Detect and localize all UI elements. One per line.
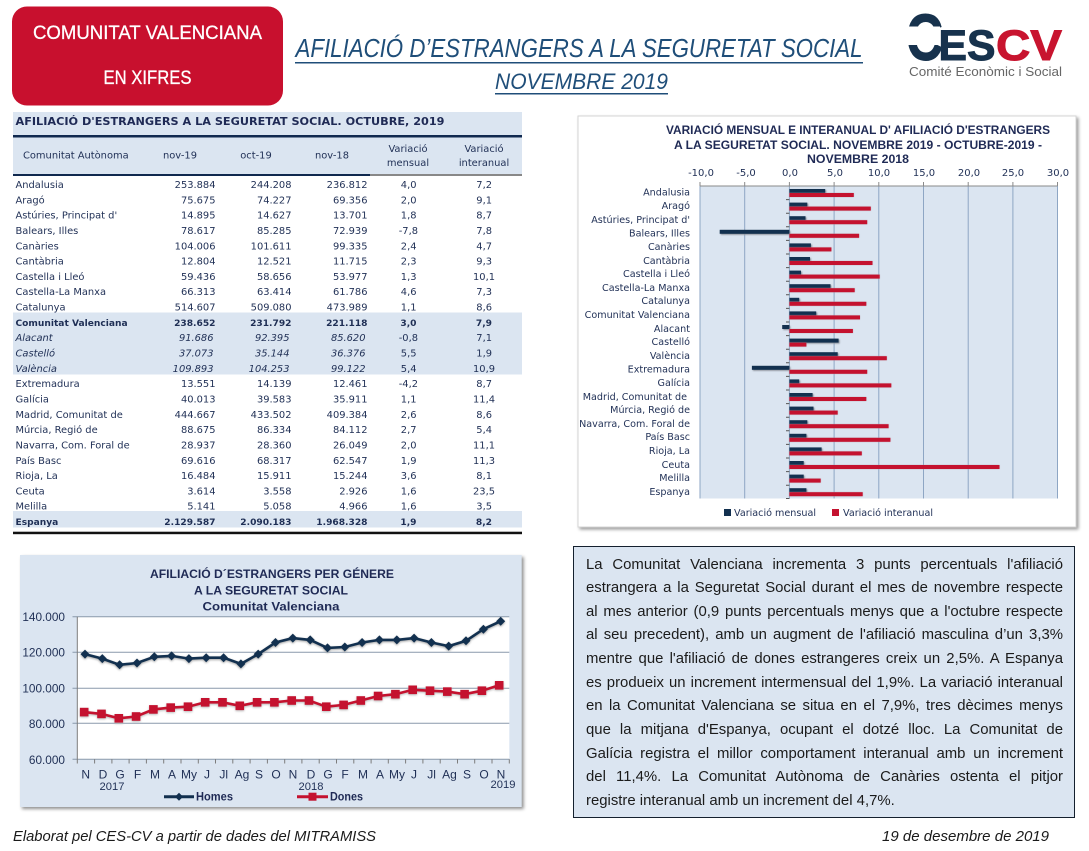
- table rows: 2,6: [401, 410, 416, 421]
- table rows: 85.620: [331, 333, 366, 344]
- table rows: 1,6: [401, 502, 416, 513]
- table rows: 88.675: [181, 425, 216, 436]
- table rows: Melilla: [16, 502, 47, 513]
- bar chart category labels: Cantàbria: [643, 255, 690, 267]
- panel: monthly and year-on-year variation bar chart: [578, 116, 1076, 527]
- bar chart category labels: Andalusia: [643, 188, 690, 198]
- line chart title: [150, 568, 394, 614]
- table rows: 8,2: [476, 518, 492, 528]
- bar chart title: [666, 124, 1050, 166]
- x axis labels: J: [204, 768, 210, 782]
- table rows: 433.502: [251, 410, 292, 421]
- table rows: Canàries: [16, 240, 59, 252]
- x axis labels: F: [341, 768, 349, 782]
- table rows: 28.360: [257, 440, 292, 451]
- bar chart category labels: Galícia: [658, 377, 690, 389]
- badge: Comunitat Valenciana en xifres: EN XIFRES: [104, 67, 192, 89]
- bar chart top axis labels: 10,0: [868, 168, 890, 179]
- text block: summary commentary: al mes anterior (0,9 punts percentuals menys que a l'octubre respecte: [586, 604, 1063, 620]
- bar chart category labels: Aragó: [662, 200, 690, 212]
- y axis labels: 100.000: [22, 682, 65, 696]
- x axis labels: F: [134, 768, 141, 782]
- table rows: Balears, Illes: [16, 226, 78, 237]
- title: [294, 33, 863, 94]
- table rows: 8,6: [476, 410, 492, 421]
- table rows: 238.652: [174, 319, 216, 329]
- bar chart category labels: Castelló: [652, 336, 690, 348]
- logo: CES-CV: ES: [938, 22, 996, 70]
- table rows: 61.786: [333, 287, 368, 298]
- title: AFILIACIÓ D’ESTRANGERS A LA SEGURETAT SOCIAL: [294, 33, 863, 63]
- table rows: Extremadura: [16, 379, 80, 390]
- y axis labels: 80.000: [29, 717, 65, 731]
- table rows: 78.617: [181, 226, 216, 237]
- panel: gender line chart: [20, 555, 522, 807]
- table rows: 2,4: [401, 241, 416, 252]
- table title band: AFILIACIÓ D'ESTRANGERS A LA SEGURETAT SOCIAL. OCTUBRE, 2019: [16, 115, 444, 128]
- text block: summary commentary: Galícia registra el millor comportament interanual amb un increment: [586, 746, 1063, 762]
- bar chart category labels: Balears, Illes: [629, 228, 690, 240]
- table rows: 7,8: [476, 226, 492, 237]
- table rows: 99.122: [331, 364, 366, 375]
- line: Homes: [85, 621, 501, 665]
- table rows: Andalusia: [16, 180, 64, 191]
- table rows: 244.208: [251, 180, 292, 191]
- table column headers: nov-19: [163, 150, 197, 162]
- table rows: 68.317: [257, 456, 292, 467]
- table rows: 10,9: [473, 364, 495, 375]
- bar chart category labels: Canàries: [648, 241, 690, 253]
- x axis labels: S: [463, 768, 471, 782]
- table rows: Espanya: [16, 518, 58, 528]
- table rows: 13.701: [333, 211, 368, 222]
- table rows: 104.006: [175, 241, 216, 252]
- table rows: 9,3: [476, 257, 492, 268]
- table rows: 1,1: [401, 303, 416, 314]
- table rows: 2,7: [401, 425, 416, 436]
- bar chart top axis labels: 30,0: [1047, 168, 1069, 179]
- table title band: [13, 112, 522, 138]
- x axis labels: Jl: [427, 768, 436, 782]
- line chart title: Comunitat Valenciana: [202, 600, 340, 614]
- table rows: 8,7: [476, 379, 492, 390]
- table rows: Navarra, Com. Foral de: [16, 440, 130, 451]
- text block: summary commentary: estrangera a la Seguretat Social durant el mes de novembre respecte: [586, 580, 1063, 596]
- bar chart category labels: Astúries, Principat d': [591, 214, 690, 226]
- table rows: 3,0: [400, 319, 416, 329]
- table column headers: Variació: [388, 143, 428, 155]
- table rows: 5.058: [263, 502, 292, 513]
- table rows: 8,7: [476, 211, 492, 222]
- table rows: Galícia: [16, 394, 49, 406]
- table rows: 15.244: [333, 471, 368, 482]
- table rows: 92.395: [255, 333, 290, 344]
- x axis labels: N: [289, 768, 297, 782]
- table rows: País Basc: [16, 455, 62, 467]
- table rows: 35.911: [333, 394, 368, 406]
- table rows: 58.656: [257, 272, 292, 283]
- table rows: 2,3: [401, 257, 416, 268]
- bar chart title: VARIACIÓ MENSUAL E INTERANUAL D' AFILIACIÓ D'ESTRANGERS: [666, 124, 1050, 137]
- table rows: 4,0: [401, 180, 416, 191]
- table rows: 62.547: [333, 456, 368, 467]
- table rows: 75.675: [181, 195, 216, 206]
- table rows: 59.436: [181, 272, 216, 283]
- bar chart category labels: Múrcia, Regió de: [610, 404, 690, 416]
- table rows: Castelló: [16, 348, 55, 360]
- table rows: 11,3: [473, 456, 495, 467]
- x axis labels: N: [497, 768, 505, 782]
- x axis labels: J: [411, 768, 417, 782]
- badge: Comunitat Valenciana en xifres: COMUNITAT VALENCIANA: [33, 22, 262, 44]
- table column headers: interanual: [459, 158, 509, 169]
- table rows: 12.461: [333, 379, 368, 390]
- line chart plot area: [72, 617, 509, 764]
- x axis labels: Ag: [235, 768, 249, 782]
- table rows: 3.614: [187, 486, 216, 497]
- table rows: 1.968.328: [316, 518, 368, 528]
- table rows: 36.376: [331, 348, 366, 360]
- table rows: Madrid, Comunitat de: [16, 410, 123, 421]
- table rows: 11.715: [333, 257, 368, 268]
- x axis labels: G: [115, 768, 125, 782]
- table rows: 11,1: [473, 440, 495, 451]
- text block: summary commentary: mentre que l'afiliació de dones estrangeres creix un 2,5%. A Espanya: [586, 651, 1063, 667]
- table rows: 85.285: [257, 226, 292, 237]
- bar chart category labels: Rioja, La: [649, 446, 690, 457]
- badge: Comunitat Valenciana en xifres: [12, 6, 283, 106]
- logo: CES-CV: CV: [996, 22, 1062, 70]
- text block: summary commentary: en la Comunitat Valenciana se situa en el 7,9%, tres dècimes menys: [586, 698, 1063, 714]
- table rows: -0,8: [399, 333, 418, 344]
- bar chart top axis labels: 15,0: [913, 168, 935, 179]
- bar chart category labels: [579, 188, 690, 498]
- table rows: Ceuta: [16, 486, 45, 497]
- x axis labels: My: [389, 768, 405, 782]
- bar chart top axis labels: 0,0: [782, 168, 798, 179]
- line chart legend: Homes: [196, 792, 233, 804]
- highlighted bands: [13, 312, 522, 528]
- table rows: 104.253: [249, 364, 290, 375]
- table rows: 444.667: [175, 410, 216, 421]
- table rows: 74.227: [257, 195, 292, 206]
- table rows: 69.356: [333, 195, 368, 206]
- x axis labels: M: [150, 768, 160, 782]
- table rows: 53.977: [333, 272, 368, 283]
- table rows: 86.334: [257, 425, 292, 436]
- table rows: 509.080: [251, 303, 292, 314]
- table rows: 7,2: [476, 180, 492, 191]
- table rows: 473.989: [327, 303, 368, 314]
- bar chart top axis labels: 20,0: [958, 168, 980, 179]
- table rows: 1,6: [401, 486, 416, 497]
- bar chart category labels: Comunitat Valenciana: [585, 310, 690, 321]
- bar chart category labels: Extremadura: [628, 364, 690, 376]
- table rows: 8,6: [476, 303, 492, 314]
- line: Dones: [84, 685, 499, 718]
- table rows: 5.141: [187, 502, 216, 513]
- bars: monthly variation: [720, 189, 839, 492]
- table rows: 1,9: [400, 518, 416, 528]
- line chart title: AFILIACIÓ D´ESTRANGERS PER GÉNERE: [150, 568, 394, 581]
- table column headers: nov-18: [315, 150, 349, 162]
- table rows: 72.939: [333, 226, 368, 237]
- table rows: Astúries, Principat d': [16, 210, 117, 222]
- table rows: 12.521: [257, 257, 292, 268]
- x axis labels: A: [168, 768, 176, 782]
- table rows: 37.073: [179, 348, 214, 360]
- table rows: Múrcia, Regió de: [16, 424, 98, 436]
- table rows: 63.414: [257, 287, 292, 298]
- line chart title: A LA SEGURETAT SOCIAL: [194, 584, 348, 598]
- table rows: 84.112: [333, 425, 368, 436]
- x axis labels: O: [271, 768, 281, 782]
- table rows: 1,8: [401, 211, 416, 222]
- table rows: [14, 180, 495, 528]
- x axis labels: Jl: [219, 768, 228, 782]
- table rows: 2,0: [401, 195, 416, 206]
- table rows: 8,1: [476, 471, 492, 482]
- table rows: 3,6: [401, 471, 416, 482]
- table rows: 14.895: [181, 211, 216, 222]
- table rows: 11,4: [473, 394, 495, 406]
- table rows: Cantàbria: [16, 256, 64, 268]
- table column headers: Variació: [464, 143, 504, 155]
- table rows: 28.937: [181, 440, 216, 451]
- table rows: 3.558: [263, 486, 292, 497]
- table rows: 1,9: [401, 456, 416, 467]
- table rows: 101.611: [251, 241, 292, 252]
- table rows: -7,8: [399, 226, 418, 237]
- table rows: 221.118: [326, 319, 368, 329]
- table column headers: mensual: [387, 158, 429, 169]
- table rows: 7,9: [476, 319, 492, 329]
- bar chart title: NOVEMBRE 2018: [807, 153, 910, 166]
- x axis labels: S: [255, 768, 263, 782]
- table column headers: Comunitat Autònoma: [23, 150, 129, 162]
- x axis labels: 2018: [299, 781, 323, 793]
- x axis labels: D: [99, 768, 108, 782]
- footer: date: 19 de desembre de 2019: [882, 828, 1050, 845]
- table rows: 253.884: [175, 180, 216, 191]
- table rows: Castella i Lleó: [16, 271, 84, 283]
- table rows: Aragó: [16, 194, 45, 206]
- table rows: 26.049: [333, 440, 368, 451]
- table rows: 39.583: [257, 394, 292, 406]
- table rows: 12.804: [181, 257, 216, 268]
- x axis labels: G: [323, 768, 333, 782]
- x axis labels: O: [479, 768, 489, 782]
- text block: summary commentary: del 11,4%. La Comunitat Autònoma de Canàries ostenta el pitjor: [586, 769, 1063, 785]
- table rows: 2.129.587: [164, 518, 216, 528]
- x axis labels: M: [358, 768, 368, 782]
- table rows: Rioja, La: [16, 471, 58, 482]
- bar chart category labels: País Basc: [645, 431, 690, 443]
- line chart legend: [164, 792, 363, 804]
- logo: CES-CV: Comité Econòmic i Social: [909, 64, 1062, 79]
- text block: summary commentary: La Comunitat Valenciana incrementa 3 punts percentuals l'afiliació: [586, 556, 1063, 572]
- table rows: 35.144: [255, 348, 290, 360]
- bar chart category labels: Ceuta: [662, 460, 690, 471]
- bar chart top axis labels: -10,0: [688, 168, 714, 179]
- table rows: 91.686: [179, 333, 214, 344]
- table rows: -4,2: [399, 379, 418, 390]
- table rows: 1,3: [401, 272, 416, 283]
- title: NOVEMBRE 2019: [495, 69, 668, 94]
- data table: [13, 112, 522, 534]
- bar chart category labels: Catalunya: [641, 296, 690, 307]
- table rows: 236.812: [327, 180, 368, 191]
- table rows: 514.607: [175, 303, 216, 314]
- table rows: 1,1: [401, 394, 416, 406]
- bar chart category labels: Castella i Lleó: [623, 268, 690, 280]
- text block: summary commentary: que la mitjana d'Espanya, ocupant el dotzé lloc. La Comunitat de: [586, 722, 1063, 738]
- table rows: Alacant: [14, 333, 54, 344]
- y axis labels: 140.000: [22, 610, 65, 624]
- bar chart category labels: València: [650, 350, 690, 362]
- table rows: 14.627: [257, 211, 292, 222]
- x axis labels: 2017: [100, 781, 124, 793]
- bar chart top axis labels: -5,0: [736, 168, 756, 179]
- y axis labels: 60.000: [29, 753, 65, 767]
- table rows: 2,0: [401, 440, 416, 451]
- table rows: Comunitat Valenciana: [16, 319, 128, 329]
- table rows: 5,5: [401, 348, 416, 360]
- table rows: 409.384: [327, 410, 368, 421]
- x axis labels: 2019: [491, 779, 515, 791]
- bar chart category labels: Madrid, Comunitat de: [583, 392, 687, 403]
- table rows: 23,5: [473, 486, 495, 497]
- table rows: 99.335: [333, 241, 368, 252]
- table rows: 15.911: [257, 471, 292, 482]
- x axis labels: Ag: [442, 768, 457, 782]
- y axis labels: [22, 610, 65, 767]
- bar chart top axis labels: 5,0: [827, 168, 843, 179]
- table rows: 4.966: [339, 502, 368, 513]
- text block: summary commentary: registre interanual amb un increment del 4,7%.: [586, 793, 895, 809]
- table rows: 5,4: [476, 425, 492, 436]
- bar chart category labels: Melilla: [659, 473, 690, 484]
- bar chart category labels: Navarra, Com. Foral de: [579, 419, 690, 430]
- table rows: 66.313: [181, 287, 216, 298]
- bar chart category labels: Castella-La Manxa: [602, 283, 690, 294]
- bar chart title: A LA SEGURETAT SOCIAL. NOVEMBRE 2019 - OCTUBRE-2019 -: [674, 139, 1042, 152]
- bar chart legend: [724, 507, 933, 519]
- y axis labels: 120.000: [22, 646, 65, 660]
- table rows: 9,1: [476, 195, 492, 206]
- x axis labels: My: [181, 768, 197, 782]
- text block: summary commentary: es produeix un increment intermensual del 1,9%. La variació interanual: [586, 675, 1063, 691]
- x axis labels: N: [81, 768, 90, 782]
- table rows: 7,1: [476, 333, 492, 344]
- bar chart category labels: Alacant: [654, 324, 690, 335]
- footer: source: Elaborat pel CES-CV a partir de dades del MITRAMISS: [13, 828, 376, 845]
- table rows: 16.484: [181, 471, 216, 482]
- logo: CES-CV: [904, 0, 1062, 79]
- bar chart top axis labels: [688, 168, 1069, 179]
- table rows: Castella-La Manxa: [16, 287, 106, 298]
- table rows: 7,3: [476, 287, 492, 298]
- table rows: 40.013: [181, 394, 216, 406]
- table rows: 231.792: [250, 319, 292, 329]
- table rows: 109.893: [173, 364, 214, 375]
- table rows: 2.090.183: [240, 518, 292, 528]
- table rows: 3,5: [476, 502, 492, 513]
- table rows: 4,6: [401, 287, 416, 298]
- table column headers: oct-19: [240, 150, 272, 162]
- text block: summary commentary: al seu precedent), amb un augment de l'afiliació masculina d’un 3,3%: [586, 627, 1063, 643]
- text block: summary commentary: [573, 546, 1075, 818]
- table rows: 5,4: [401, 364, 416, 375]
- logo: CES-CV: C: [906, 0, 943, 74]
- bar chart category labels: Espanya: [649, 487, 690, 498]
- x axis labels: A: [376, 768, 384, 782]
- table rows: 4,7: [476, 241, 492, 252]
- table rows: 10,1: [473, 272, 495, 283]
- table rows: 14.139: [257, 379, 292, 390]
- table rows: 13.551: [181, 379, 216, 390]
- line chart legend: Dones: [330, 792, 363, 804]
- bar chart top axis labels: 25,0: [1002, 168, 1024, 179]
- table rows: 2.926: [339, 486, 368, 497]
- table rows: 69.616: [181, 456, 216, 467]
- table rows: 1,9: [476, 348, 492, 360]
- bar chart legend: Variació mensual: [734, 507, 816, 519]
- table rows: València: [16, 363, 57, 375]
- table column headers: [13, 138, 522, 176]
- x axis labels: [81, 768, 515, 793]
- x axis labels: D: [307, 768, 316, 782]
- bar chart legend: Variació interanual: [843, 507, 933, 519]
- table rows: Catalunya: [16, 303, 66, 314]
- bars: year-on-year variation: [789, 193, 1000, 496]
